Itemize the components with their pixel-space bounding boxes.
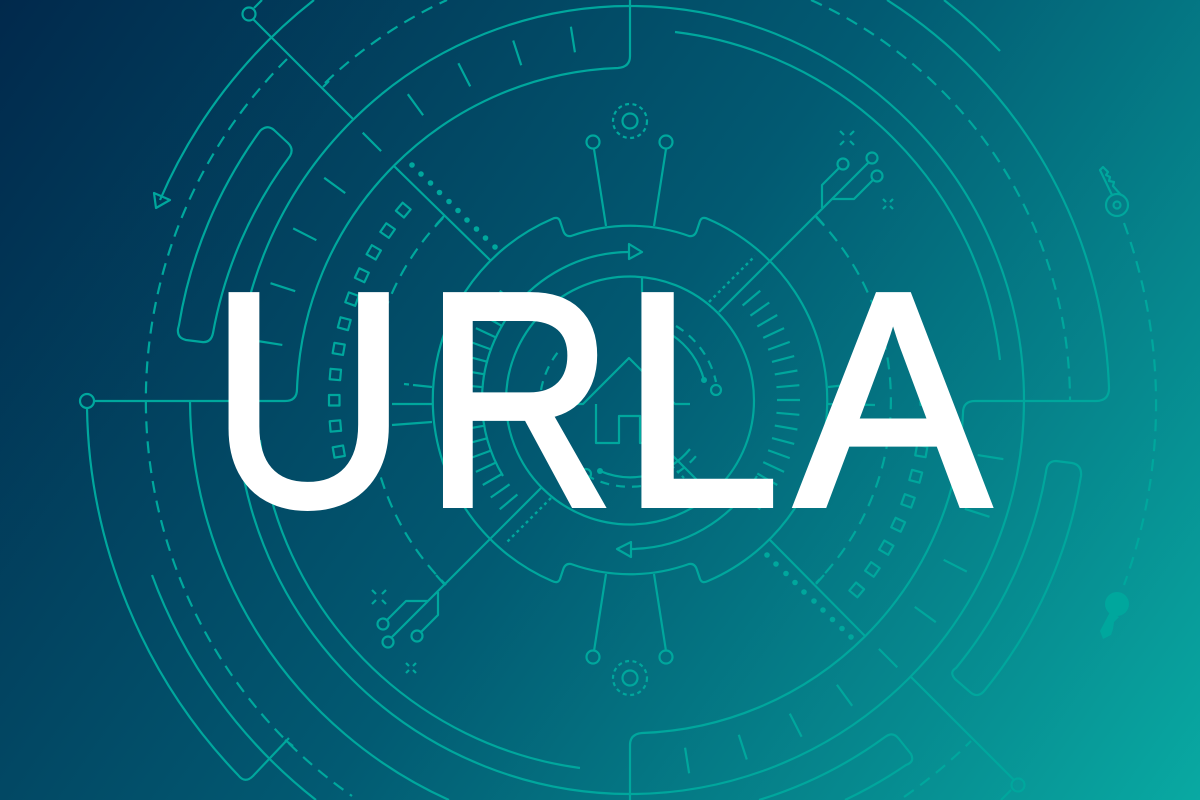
inner diagonal hatch <box>660 443 706 489</box>
left connector with node and far arc <box>80 0 630 780</box>
spark marks <box>372 131 893 673</box>
right connector with arc <box>630 0 1109 800</box>
outer ring arc with arrowhead <box>154 0 1000 208</box>
target icon bottom <box>613 661 647 695</box>
inner status arcs upper right <box>541 326 721 395</box>
target icon top <box>613 104 647 138</box>
outer dashed arc between keys <box>1124 223 1156 585</box>
radial tick cluster left <box>460 291 517 509</box>
title: A <box>796 229 991 570</box>
diagonal spokes with dots <box>394 166 865 636</box>
inner dashed arcs <box>369 216 891 585</box>
gear outline <box>433 218 827 582</box>
rotating arrow top <box>482 244 642 476</box>
title: R <box>424 229 614 570</box>
house icon <box>570 358 690 443</box>
circuit upper right <box>709 152 882 312</box>
radial tick cluster right <box>743 291 800 509</box>
inner circle <box>506 276 754 524</box>
bottom capsule <box>759 734 912 800</box>
outer ring lower left arc <box>152 575 316 800</box>
second solid ring <box>190 401 449 800</box>
dotted rows <box>409 162 854 640</box>
key icon filled <box>1100 592 1129 639</box>
rotating arrow bottom <box>617 476 757 557</box>
gear antennas <box>586 136 672 664</box>
outer dashed ring <box>146 59 971 797</box>
left capsule <box>178 127 292 342</box>
right capsule <box>952 461 1081 695</box>
short horizontal spokes left <box>392 384 432 425</box>
lower right diagonal with node <box>911 677 1024 800</box>
key icon outline <box>1100 167 1128 216</box>
inner status arcs lower left <box>581 449 700 487</box>
title: L <box>621 229 780 570</box>
inner partial arcs <box>260 32 1000 768</box>
square markers right <box>849 342 931 597</box>
square markers left <box>329 203 411 458</box>
second dashed ring <box>323 0 1070 400</box>
short horizontal spokes right <box>828 384 875 425</box>
main ring <box>236 6 1024 794</box>
title: U <box>210 229 407 570</box>
upper left diagonal with node <box>242 0 353 119</box>
circuit lower left <box>378 488 551 648</box>
ring tick marks <box>257 27 1003 773</box>
